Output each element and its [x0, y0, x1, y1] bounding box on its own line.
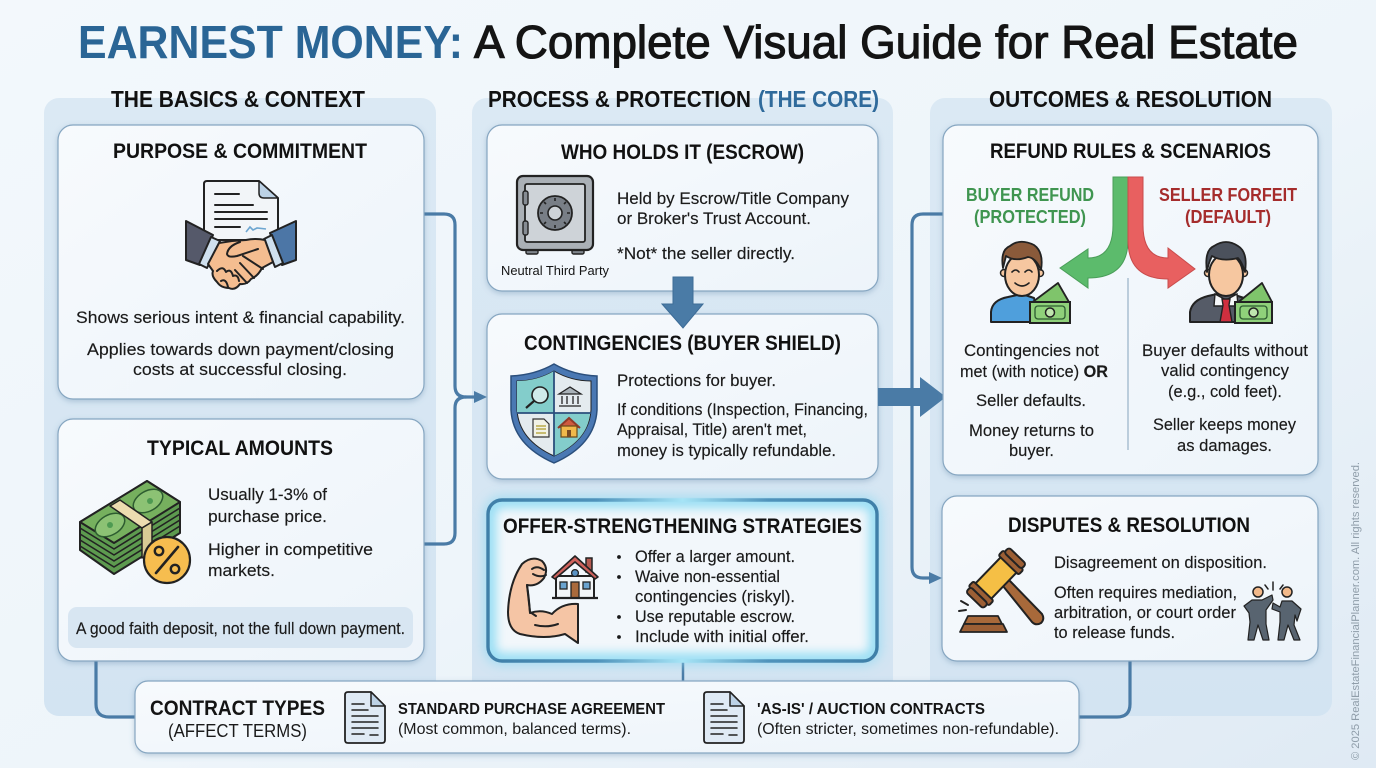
connector: contingencies out to outcomes cards	[912, 214, 943, 584]
connector: offer card to contract types	[682, 662, 684, 682]
text: typical amounts: Usually 1-3% of	[208, 485, 327, 504]
connector: bottom right to contract types	[1078, 660, 1130, 717]
arrow: who holds it to contingencies	[662, 277, 703, 328]
list: strategies: Waive non-essential	[635, 567, 780, 586]
icon: shield	[511, 364, 597, 463]
text: who holds it: Held by Escrow/Title Company	[617, 189, 849, 208]
text: disputes: Disagreement on disposition.	[1054, 553, 1267, 572]
icon: document	[345, 692, 385, 743]
heading: process and protection: (THE CORE)	[758, 86, 879, 112]
arrow: red to seller	[1128, 177, 1195, 288]
list: strategies: contingencies (riskyl).	[635, 587, 795, 606]
panel: process column background	[472, 98, 893, 716]
text: buyer refund scenario: Seller defaults.	[976, 391, 1086, 410]
heading: process and protection: PROCESS & PROTECTION	[488, 86, 751, 112]
heading: REFUND RULES & SCENARIOS	[990, 139, 1271, 163]
text: contingencies: If conditions (Inspection, Financing,	[617, 400, 868, 419]
text: who holds it: or Broker's Trust Account.	[617, 209, 811, 228]
title: EARNEST MONEY:	[78, 16, 463, 68]
text: buyer refund scenario: met (with notice) OR	[960, 362, 1108, 381]
arrow: green to buyer	[1060, 177, 1128, 288]
text: as-is auction contracts: (Often stricter, sometimes non-refundable).	[757, 721, 1059, 738]
label: buyer refund	[966, 185, 1094, 227]
heading: WHO HOLDS IT (ESCROW)	[561, 140, 804, 164]
list: strategies: Use reputable escrow.	[635, 607, 795, 626]
list: strategies: Include with initial offer.	[635, 627, 809, 646]
connector: left column cards to contingencies	[424, 214, 487, 544]
text: contingencies: Appraisal, Title) aren't met,	[617, 420, 807, 439]
text: buyer refund scenario: Contingencies not	[964, 341, 1099, 360]
heading: contract types	[150, 697, 325, 741]
icon: contract and handshake	[186, 181, 296, 289]
panel: disputes and resolution	[942, 496, 1318, 661]
connector: bottom left to contract types	[96, 660, 136, 717]
panel: contract types	[135, 681, 1079, 753]
text: disputes: arbitration, or court order	[1054, 603, 1236, 622]
label: seller forfeit	[1159, 185, 1297, 227]
text: seller forfeit scenario: Buyer defaults without	[1142, 341, 1308, 360]
text: buyer refund scenario: Money returns to	[969, 421, 1094, 440]
text: who holds it	[617, 189, 849, 263]
text: contingencies: money is typically refundable.	[617, 441, 836, 460]
icon: two people arguing	[1244, 582, 1301, 640]
heading: OFFER-STRENGTHENING STRATEGIES	[503, 514, 862, 538]
panel: the basics column background	[44, 98, 436, 716]
copyright note: © 2025 RealEstateFinancialPlanner.com. All rights reserved.	[1350, 462, 1362, 760]
icon: buyer with cash	[991, 242, 1070, 323]
text: buyer refund scenario	[960, 341, 1108, 460]
text: disputes: to release funds.	[1054, 623, 1175, 642]
text: purpose description: costs at successful closing.	[133, 360, 347, 379]
text: seller forfeit scenario	[1142, 341, 1308, 455]
text: typical amounts: Higher in competitive	[208, 540, 373, 559]
text: purpose description: Applies towards down payment/closing	[87, 340, 394, 359]
icon: cash stack with percent badge	[80, 481, 190, 583]
text: standard purchase agreement: (Most common, balanced terms).	[398, 721, 631, 738]
text: seller forfeit scenario: (e.g., cold feet).	[1168, 382, 1282, 401]
label: buyer refund: BUYER REFUND	[966, 185, 1094, 205]
title: A Complete Visual Guide for Real Estate	[474, 16, 1298, 68]
title	[78, 16, 1298, 68]
heading: the basics and context: THE BASICS & CONTEXT	[111, 86, 365, 112]
panel: purpose and commitment	[58, 125, 424, 399]
label: seller forfeit: (DEFAULT)	[1185, 207, 1271, 227]
text: seller forfeit scenario: Seller keeps money	[1153, 415, 1296, 434]
text: purpose description: Shows serious intent & financial capability.	[76, 308, 405, 327]
panel: typical amounts	[58, 419, 424, 661]
heading: CONTINGENCIES (BUYER SHIELD)	[524, 331, 841, 355]
heading: outcomes and resolution: OUTCOMES & RESOLUTION	[989, 86, 1272, 112]
text: contingencies: Protections for buyer.	[617, 371, 776, 390]
label: buyer refund: (PROTECTED)	[974, 207, 1086, 227]
text: seller forfeit scenario: valid contingency	[1161, 361, 1289, 380]
text: standard purchase agreement	[398, 701, 665, 738]
panel: offer-strengthening strategies	[485, 497, 880, 664]
label: seller forfeit: SELLER FORFEIT	[1159, 185, 1297, 205]
panel: contingencies	[487, 314, 878, 479]
text: as-is auction contracts: 'AS-IS' / AUCTION CONTRACTS	[757, 701, 985, 718]
panel: outcomes column background	[930, 98, 1332, 716]
panel: refund rules and scenarios	[943, 125, 1318, 475]
icon: seller with cash	[1190, 242, 1272, 323]
text: seller forfeit scenario: as damages.	[1177, 436, 1272, 455]
heading: PURPOSE & COMMITMENT	[113, 139, 367, 163]
text: typical amounts	[208, 485, 373, 580]
text: buyer refund scenario: buyer.	[1009, 441, 1054, 460]
text: contingencies	[617, 371, 868, 460]
heading: contract types: CONTRACT TYPES	[150, 697, 325, 720]
icon: gavel	[959, 546, 1043, 632]
icon: document	[704, 692, 744, 743]
text: as-is auction contracts	[757, 701, 1059, 738]
text: typical amounts: purchase price.	[208, 507, 327, 526]
icon: safe	[517, 176, 593, 254]
heading: contract types: (AFFECT TERMS)	[168, 721, 307, 741]
heading: DISPUTES & RESOLUTION	[1008, 513, 1250, 537]
text: disputes: Often requires mediation,	[1054, 583, 1237, 602]
arrow: contingencies to outcomes	[878, 377, 946, 417]
text: standard purchase agreement: STANDARD PURCHASE AGREEMENT	[398, 701, 665, 718]
text: who holds it: *Not* the seller directly.	[617, 244, 795, 263]
panel: who holds it	[487, 125, 878, 291]
text: purpose description	[76, 308, 405, 379]
heading: TYPICAL AMOUNTS	[147, 436, 333, 460]
icon: flexed arm and house	[508, 556, 598, 643]
list: strategies: Offer a larger amount.	[635, 547, 795, 566]
list: strategies	[617, 547, 809, 646]
label: neutral third party: Neutral Third Party	[501, 264, 610, 278]
callout: good faith deposit: A good faith deposit, not the full down payment.	[76, 619, 405, 638]
callout: good faith deposit	[68, 607, 413, 648]
text: typical amounts: markets.	[208, 561, 275, 580]
text: disputes	[1054, 553, 1267, 642]
